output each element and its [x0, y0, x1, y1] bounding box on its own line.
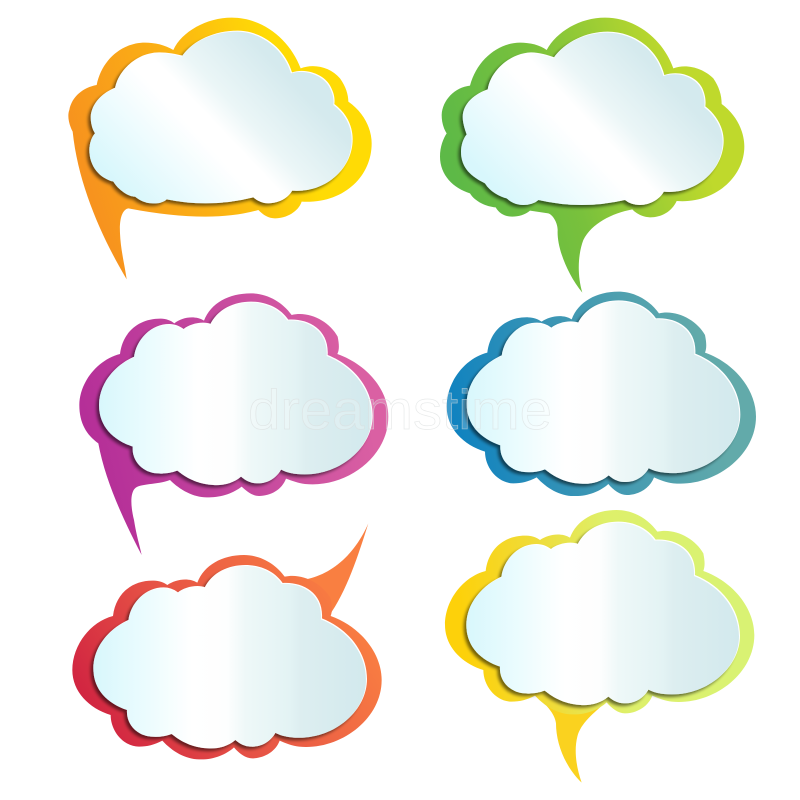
panel: magenta cloud bubble	[79, 293, 388, 555]
bubble backing	[447, 292, 756, 496]
panel: yellow-lime cloud bubble	[445, 510, 754, 783]
upward tail	[280, 523, 368, 622]
panel: orange-yellow cloud bubble	[68, 18, 372, 279]
blank cloud face	[99, 303, 372, 485]
blank cloud face	[466, 523, 739, 705]
bubble backing with tail	[68, 18, 372, 279]
blank cloud face	[89, 32, 352, 203]
blank cloud face	[93, 566, 366, 748]
blank cloud face	[467, 301, 739, 484]
downward tail	[535, 695, 607, 783]
bubble backing	[445, 510, 754, 714]
panel: red-orange cloud bubble	[72, 523, 382, 759]
bubble backing with tail	[440, 18, 744, 293]
bubble backing with tail	[79, 293, 388, 555]
panel: green cloud bubble	[440, 18, 744, 293]
blank cloud face	[461, 33, 723, 205]
bubble backing	[72, 555, 382, 759]
watermark text: dreamstime	[248, 378, 552, 441]
panel: blue cloud bubble	[447, 292, 756, 496]
